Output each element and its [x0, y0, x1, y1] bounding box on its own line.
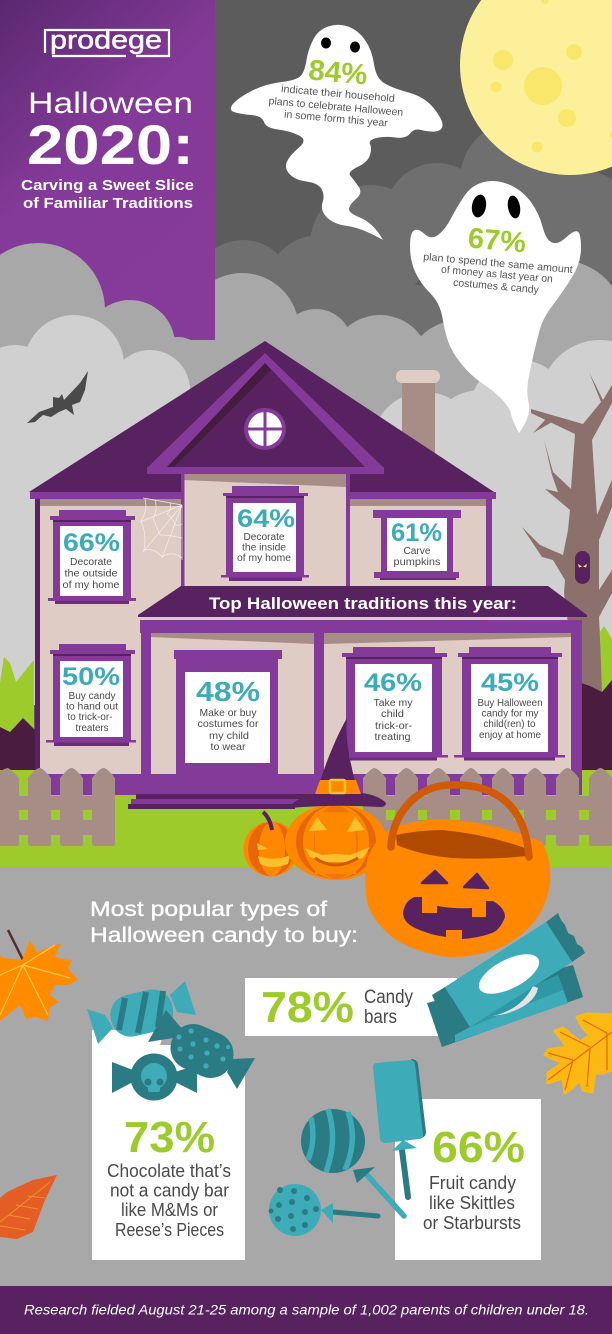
- title: 2020:: [27, 113, 194, 176]
- logo: prodege: prodege: [50, 24, 162, 54]
- ghost: 84%: 84%: [307, 54, 369, 92]
- window: 64%: the inside: [242, 542, 286, 554]
- ghost: 67%: of money as last year on: [441, 264, 553, 285]
- window: 45%: 45%: [481, 669, 539, 697]
- window: 61%: [373, 510, 461, 580]
- window: 45%: child(ren) to: [484, 719, 536, 730]
- card: 66% fruit candy: or Starbursts: [423, 1212, 521, 1233]
- round attic window: [244, 408, 286, 450]
- window: 64%: of my home: [237, 553, 291, 564]
- title: [21, 87, 194, 212]
- window: 61%: 61%: [391, 519, 442, 547]
- window: 66%: [48, 510, 136, 604]
- card: 73% chocolate: Chocolate that’s: [107, 1160, 231, 1181]
- window: 64%: [221, 486, 309, 581]
- ghost: 67%: plan to spend the same amount: [423, 251, 573, 276]
- small pumpkin: [244, 812, 298, 876]
- window: 50%: Buy candy: [68, 691, 116, 702]
- footer band: Research fielded August 21-25 among a sample of 1,002 parents of children under 18.: [24, 1302, 589, 1318]
- window: 50%: [46, 644, 136, 746]
- lower roof with heading: Top Halloween traditions this year:: [209, 594, 517, 613]
- road: [0, 867, 612, 1286]
- picket fence: right: [363, 768, 612, 846]
- window: 48%: [174, 650, 282, 780]
- big jack-o-lantern: [285, 804, 387, 880]
- window: 64%: 64%: [237, 505, 295, 533]
- upper walls: [35, 499, 492, 795]
- window: 46%: 46%: [364, 669, 422, 697]
- house: [29, 341, 587, 809]
- window: 46%: Take my: [374, 698, 412, 709]
- heading: candy: [90, 898, 358, 947]
- lawn: [0, 770, 612, 867]
- card: 73% chocolate: [92, 1030, 245, 1260]
- card: 66% fruit candy: like Skittles: [429, 1192, 515, 1213]
- window: 66%: of my home: [62, 580, 120, 591]
- window: 61%: pumpkins: [394, 557, 440, 568]
- window: 48%: Make or buy: [200, 707, 257, 719]
- chimney: [396, 370, 440, 460]
- card: 73% chocolate: like M&Ms or: [121, 1199, 218, 1220]
- window: 66%: 66%: [63, 529, 120, 557]
- bare tree: [522, 372, 612, 700]
- window: 46%: [340, 647, 448, 760]
- window: 48%: to wear: [210, 741, 246, 753]
- icon: tree hollow with eyes: [575, 551, 590, 584]
- banner cloud: [0, 243, 215, 700]
- pumpkin candy bucket: [365, 785, 550, 957]
- icon: candy bars: [427, 913, 585, 1047]
- ghost: 84%: in some form this year: [284, 108, 389, 130]
- card: 78% candy bars: 78%: [261, 983, 354, 1032]
- window: 66%: Decorate: [70, 557, 112, 568]
- window: 46%: treating: [374, 732, 410, 743]
- icon: striped lollipop: [301, 1109, 404, 1216]
- lower floor: [35, 620, 582, 795]
- card: 66% fruit candy: 66%: [432, 1123, 525, 1172]
- pale cloud layer: [0, 315, 612, 705]
- window: 61%: Carve: [404, 546, 431, 557]
- gable section: [147, 353, 384, 590]
- icon: maple leaf: [0, 930, 78, 1021]
- porch steps: [128, 779, 324, 809]
- card: 78% candy bars: bars: [364, 1007, 397, 1028]
- window: 45%: candy for my: [482, 708, 538, 720]
- ghost: 84%: plans to celebrate Halloween: [268, 95, 404, 119]
- ghost: 67%: 67%: [467, 223, 527, 259]
- icon: bat: [27, 371, 88, 423]
- lower roof with heading: [138, 586, 587, 617]
- icon: dotted candy: [148, 1010, 255, 1089]
- window: 46%: trick-or-: [375, 721, 412, 732]
- ghost: 84%: [231, 25, 443, 240]
- card: 66% fruit candy: Fruit candy: [429, 1172, 517, 1193]
- window: 45%: enjoy at home: [479, 730, 541, 741]
- card: 78% candy bars: Candy: [364, 987, 413, 1008]
- window: 50%: to hand out: [66, 702, 118, 712]
- card: 66% fruit candy: [395, 1099, 541, 1260]
- window: 48%: 48%: [196, 676, 260, 707]
- window: 46%: child: [381, 709, 404, 720]
- title: of Familiar Traditions: [23, 196, 193, 212]
- window: 50%: treaters: [76, 723, 108, 734]
- heading: candy: Halloween candy to buy:: [90, 924, 358, 947]
- heading: candy: Most popular types of: [90, 898, 327, 921]
- window: 48%: my child: [209, 730, 249, 742]
- footer band: [0, 1286, 612, 1334]
- light-grey cloud layer: [185, 260, 612, 700]
- icon: dotted lollipop: [268, 1184, 378, 1236]
- picket fence: left: [0, 768, 115, 846]
- icon: skull candy: [112, 1054, 197, 1100]
- card: 73% chocolate: Reese’s Pieces: [115, 1219, 224, 1240]
- panel: purple title banner: [0, 0, 215, 345]
- ghost: 67%: [410, 181, 581, 433]
- icon: orange leaf: [0, 1175, 57, 1239]
- card: 78% candy bars: [245, 978, 457, 1036]
- moon: [460, 0, 612, 175]
- main roof: [29, 341, 494, 492]
- window: 50%: to trick-or-: [68, 712, 112, 723]
- ghost: 84%: indicate their household: [281, 83, 395, 105]
- icon: popsicle candy: [373, 1059, 426, 1197]
- window: 66%: the outside: [64, 568, 118, 580]
- mid-grey cloud layer: [193, 120, 612, 370]
- window: 45%: [454, 647, 565, 760]
- icon: striped candy: [87, 981, 196, 1044]
- window: 45%: Buy Halloween: [478, 698, 542, 709]
- ghost: 67%: costumes & candy: [453, 277, 540, 296]
- window: 50%: 50%: [62, 663, 120, 691]
- bushes and grass: [0, 626, 612, 800]
- title: Halloween: [28, 87, 193, 120]
- spider web: [140, 498, 182, 560]
- witch hat: [290, 718, 386, 808]
- title: Carving a Sweet Slice: [21, 178, 194, 194]
- card: 73% chocolate: 73%: [124, 1113, 215, 1162]
- icon: oak leaf: [545, 1014, 612, 1093]
- window: 64%: Decorate: [244, 532, 285, 543]
- card: 73% chocolate: not a candy bar: [110, 1180, 229, 1200]
- window: 48%: costumes for: [198, 718, 259, 730]
